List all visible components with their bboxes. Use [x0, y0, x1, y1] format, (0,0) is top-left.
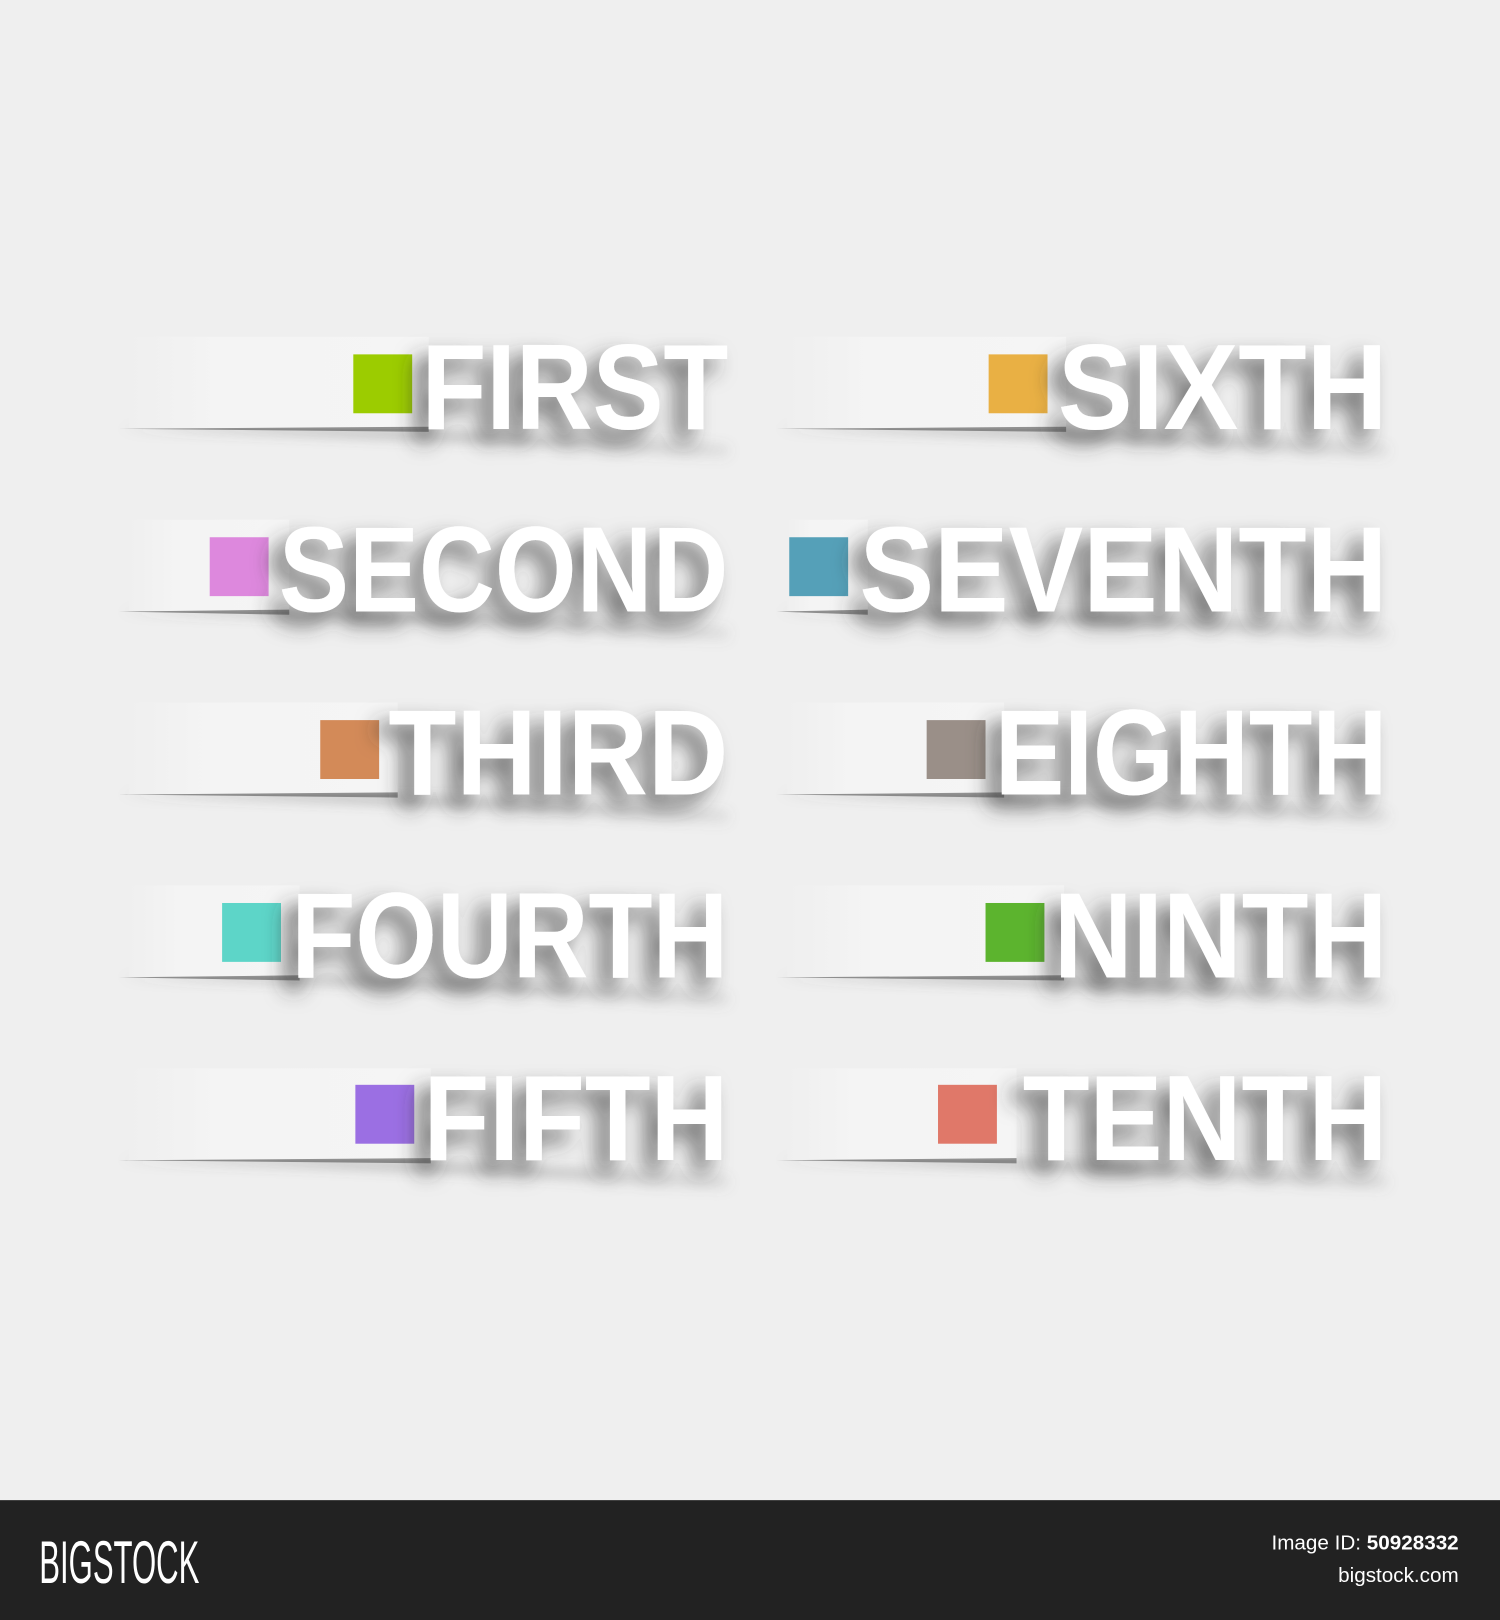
label: FIRST	[119, 319, 728, 460]
label: SIXTH	[777, 319, 1387, 460]
footer url: bigstock.com	[1338, 1564, 1459, 1587]
label: TENTH	[777, 1050, 1387, 1191]
label: SEVENTH: SEVENTH	[860, 502, 1387, 638]
label: EIGHTH	[777, 684, 1387, 825]
label: FOURTH: FOURTH	[291, 867, 728, 1003]
label: FIFTH: FIFTH	[424, 1050, 728, 1186]
label: SECOND: SECOND	[279, 502, 728, 638]
footer logo: BIGSTOCK	[39, 1529, 199, 1596]
label: THIRD: THIRD	[388, 684, 728, 821]
footer bar	[0, 1500, 1500, 1620]
label: FIRST: FIRST	[421, 319, 728, 455]
label: EIGHTH: EIGHTH	[995, 684, 1387, 821]
label: THIRD	[119, 684, 728, 825]
label: TENTH: TENTH	[1023, 1050, 1387, 1186]
label: NINTH	[777, 867, 1387, 1008]
label: SIXTH: SIXTH	[1058, 319, 1387, 455]
label: FOURTH	[119, 867, 728, 1008]
footer image id: Image ID: 50928332	[1271, 1532, 1459, 1555]
label: SECOND	[119, 502, 728, 643]
label: FIFTH	[119, 1050, 728, 1191]
label: NINTH: NINTH	[1054, 867, 1387, 1003]
